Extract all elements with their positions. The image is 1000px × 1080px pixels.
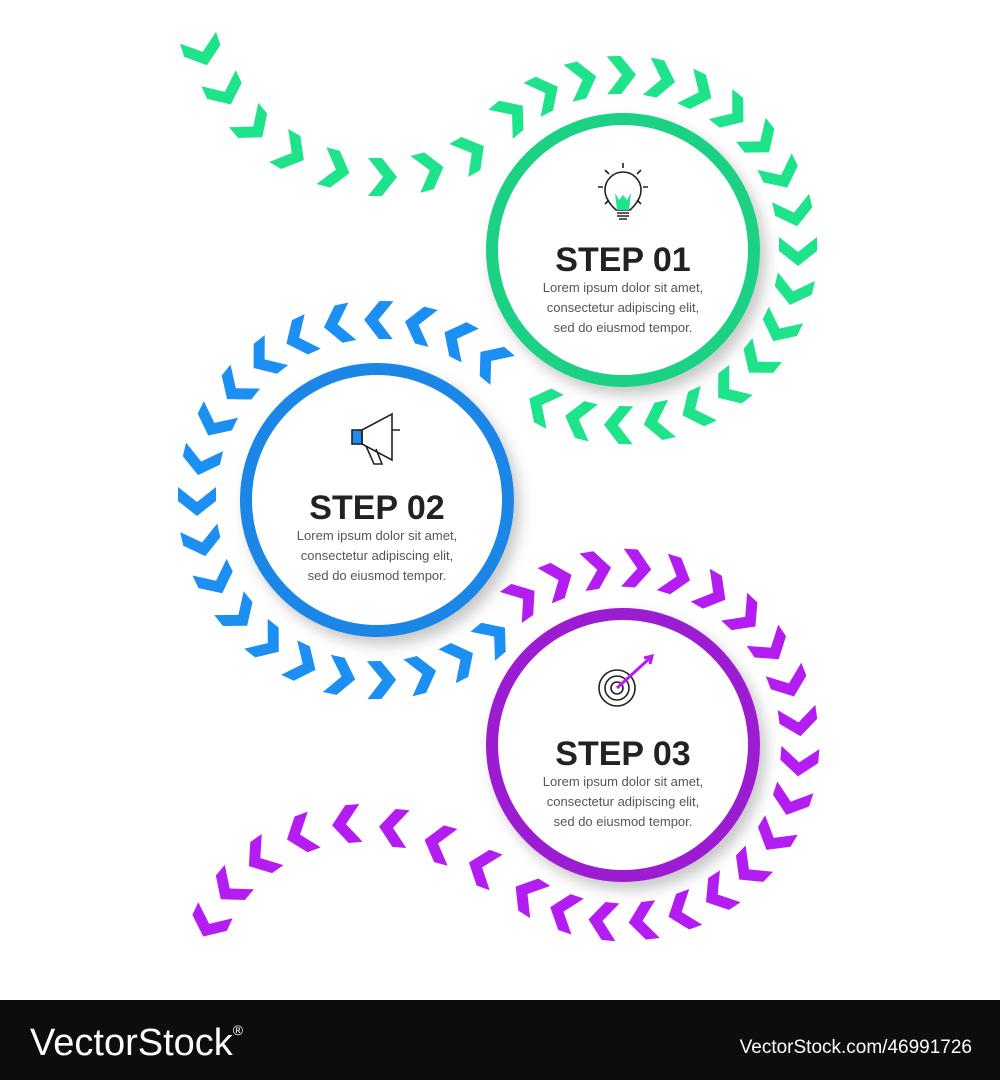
purple arrow tail bbox=[186, 804, 503, 945]
icon: light bulb bbox=[598, 163, 648, 219]
text: step 03 description: consectetur adipiscing elit, bbox=[547, 794, 699, 809]
footer logo text: VectorStock bbox=[30, 1022, 233, 1064]
circle: step 03 bbox=[492, 614, 754, 876]
footer logo text: ® bbox=[233, 1022, 244, 1038]
green arrow tail bbox=[180, 32, 493, 196]
text: step 03 description: sed do eiusmod tempor. bbox=[554, 814, 692, 829]
text: step 01 title: STEP 01 bbox=[555, 241, 691, 279]
text: step 02 title: STEP 02 bbox=[309, 489, 445, 527]
text: step 01 description: sed do eiusmod tempor. bbox=[554, 320, 692, 335]
text: step 01 description: consectetur adipiscing elit, bbox=[547, 300, 699, 315]
text: step 03 title: STEP 03 bbox=[555, 735, 691, 773]
text: step 02 description: Lorem ipsum dolor sit amet, bbox=[297, 528, 457, 543]
circle: step 01 bbox=[492, 119, 754, 381]
text: step 02 description: consectetur adipiscing elit, bbox=[301, 548, 453, 563]
text: step 03 description: Lorem ipsum dolor sit amet, bbox=[543, 774, 703, 789]
circle: step 02 bbox=[246, 369, 508, 631]
blue arrow arc bbox=[178, 301, 517, 699]
green arrow arc bbox=[488, 56, 817, 444]
purple arrow arc bbox=[500, 549, 819, 941]
text: step 01 description: Lorem ipsum dolor sit amet, bbox=[543, 280, 703, 295]
icon: target bbox=[599, 656, 652, 706]
icon: megaphone bbox=[352, 414, 400, 464]
footer bar bbox=[0, 1000, 1000, 1080]
text: step 02 description: sed do eiusmod tempor. bbox=[308, 568, 446, 583]
footer url: VectorStock.com/46991726 bbox=[740, 1037, 972, 1058]
